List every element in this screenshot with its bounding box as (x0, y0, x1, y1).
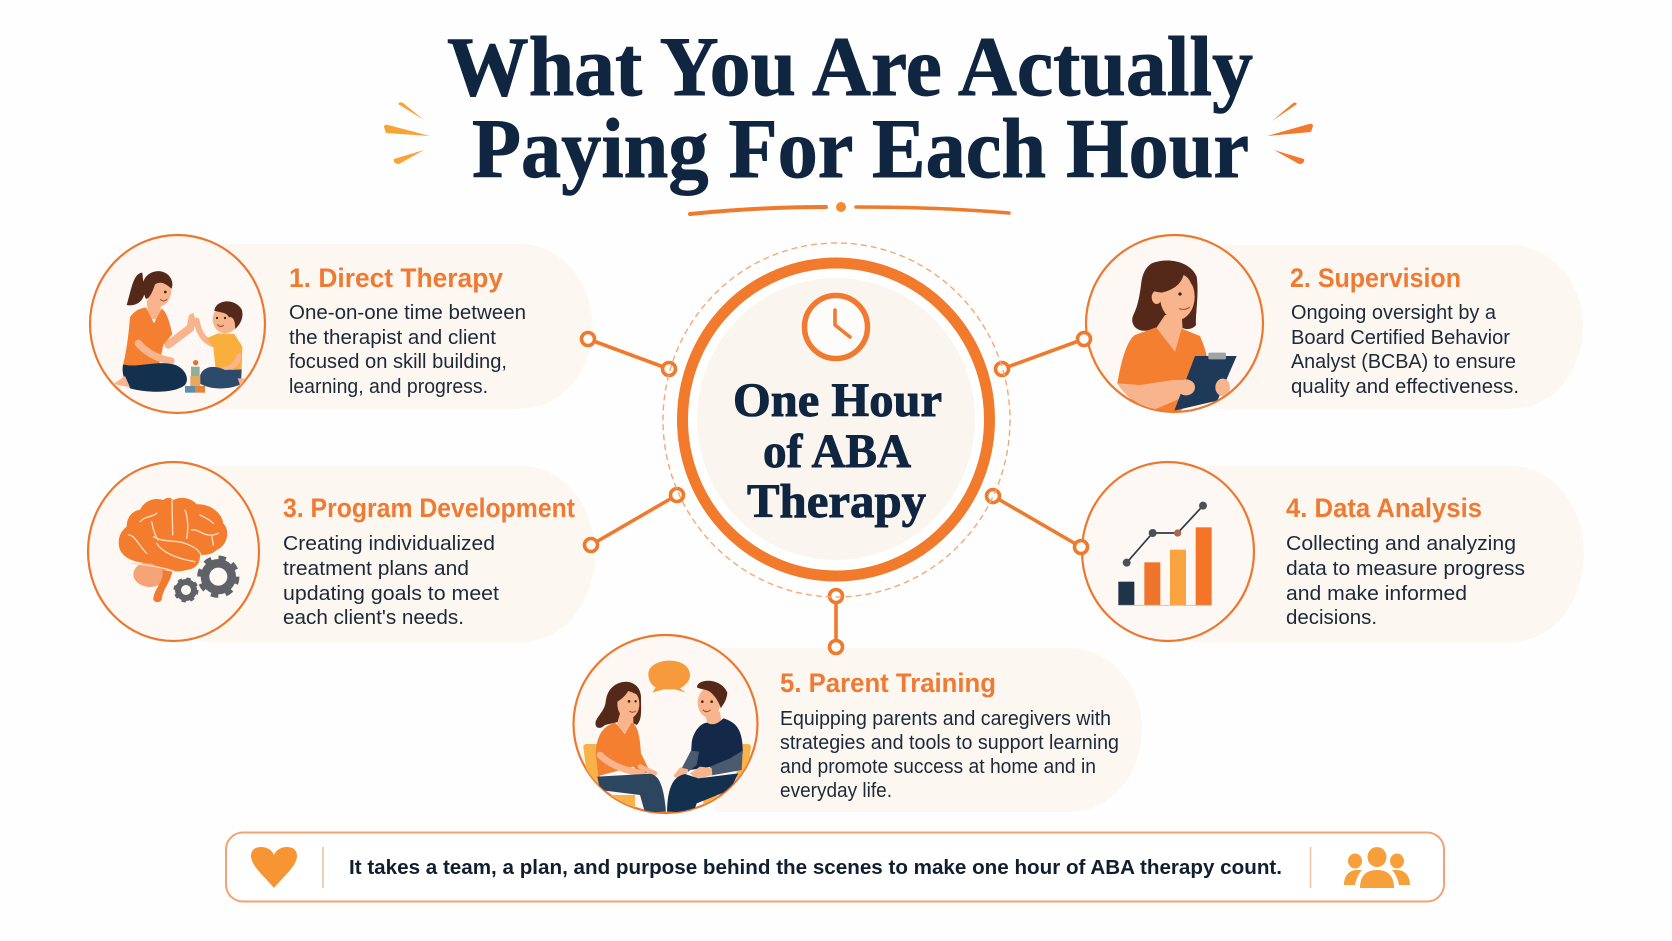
center label: of ABA (763, 425, 911, 478)
text: parent training description: everyday life. (780, 780, 892, 802)
connector: parent training (830, 590, 842, 654)
text: data analysis description: and make informed (1286, 583, 1467, 605)
panel: supervision (1086, 235, 1583, 413)
text: direct therapy description: One-on-one time between (289, 302, 526, 324)
title: What You Are Actually (447, 20, 1253, 114)
panel: direct therapy (90, 235, 592, 413)
connector: direct therapy (582, 332, 676, 376)
text: supervision description: Board Certified Behavior (1291, 327, 1510, 349)
text: parent training description: strategies and tools to support learning (780, 732, 1119, 754)
icon: heart (251, 847, 297, 888)
title underline with dot (690, 202, 1009, 214)
text: parent training description (780, 708, 1119, 802)
heading: direct therapy: 1. Direct Therapy (289, 263, 503, 293)
text: data analysis description: decisions. (1286, 607, 1377, 629)
text: parent training description: and promote success at home and in (780, 756, 1096, 778)
heading: program development: 3. Program Development (283, 493, 575, 523)
heading: parent training: 5. Parent Training (780, 668, 996, 698)
icon: group of people (1344, 847, 1410, 888)
icon: brain and gears (88, 462, 259, 641)
text: direct therapy description (289, 302, 526, 398)
title: Paying For Each Hour (472, 102, 1249, 196)
connector: supervision (996, 332, 1090, 376)
text: direct therapy description: focused on skill building, (289, 351, 507, 373)
left spark accent (384, 102, 430, 164)
text: program development description: treatment plans and (283, 558, 469, 580)
text: supervision description (1291, 302, 1519, 398)
text: data analysis description (1286, 533, 1525, 629)
center label: Therapy (747, 475, 926, 528)
text: program development description: each client's needs. (283, 607, 464, 629)
connector: program development (584, 488, 684, 552)
text: direct therapy description: the therapist and client (289, 327, 496, 349)
text: parent training description: Equipping parents and caregivers with (780, 708, 1111, 730)
title (447, 20, 1253, 196)
icon: clock (804, 296, 868, 358)
text: direct therapy description: learning, and progress. (289, 376, 488, 398)
panel: program development (88, 462, 595, 642)
callout banner (226, 832, 1444, 902)
icon: supervisor with clipboard (1086, 235, 1263, 413)
center label: One Hour (733, 374, 942, 427)
center label (733, 374, 942, 528)
panel: parent training (574, 635, 1142, 813)
connector: data analysis (986, 490, 1088, 554)
right spark accent (1267, 102, 1313, 164)
text: supervision description: Analyst (BCBA) to ensure (1291, 351, 1516, 373)
text: data analysis description: Collecting and analyzing (1286, 533, 1516, 555)
heading: supervision: 2. Supervision (1290, 263, 1461, 293)
text: program development description (283, 533, 499, 629)
text: data analysis description: data to measure progress (1286, 558, 1525, 580)
heading: data analysis: 4. Data Analysis (1286, 493, 1482, 523)
center hub: one hour of ABA therapy (663, 243, 1010, 597)
banner text: It takes a team, a plan, and purpose behind the scenes to make one hour of ABA therapy count. (349, 856, 1282, 879)
text: supervision description: quality and effectiveness. (1291, 376, 1519, 398)
icon: therapist and child high five (90, 235, 265, 413)
text: supervision description: Ongoing oversight by a (1291, 302, 1497, 324)
icon: parent and therapist talking (574, 635, 758, 813)
text: program development description: updating goals to meet (283, 583, 499, 605)
icon: bar chart with trend line (1082, 462, 1254, 641)
panel: data analysis (1082, 462, 1584, 642)
text: program development description: Creating individualized (283, 533, 495, 555)
